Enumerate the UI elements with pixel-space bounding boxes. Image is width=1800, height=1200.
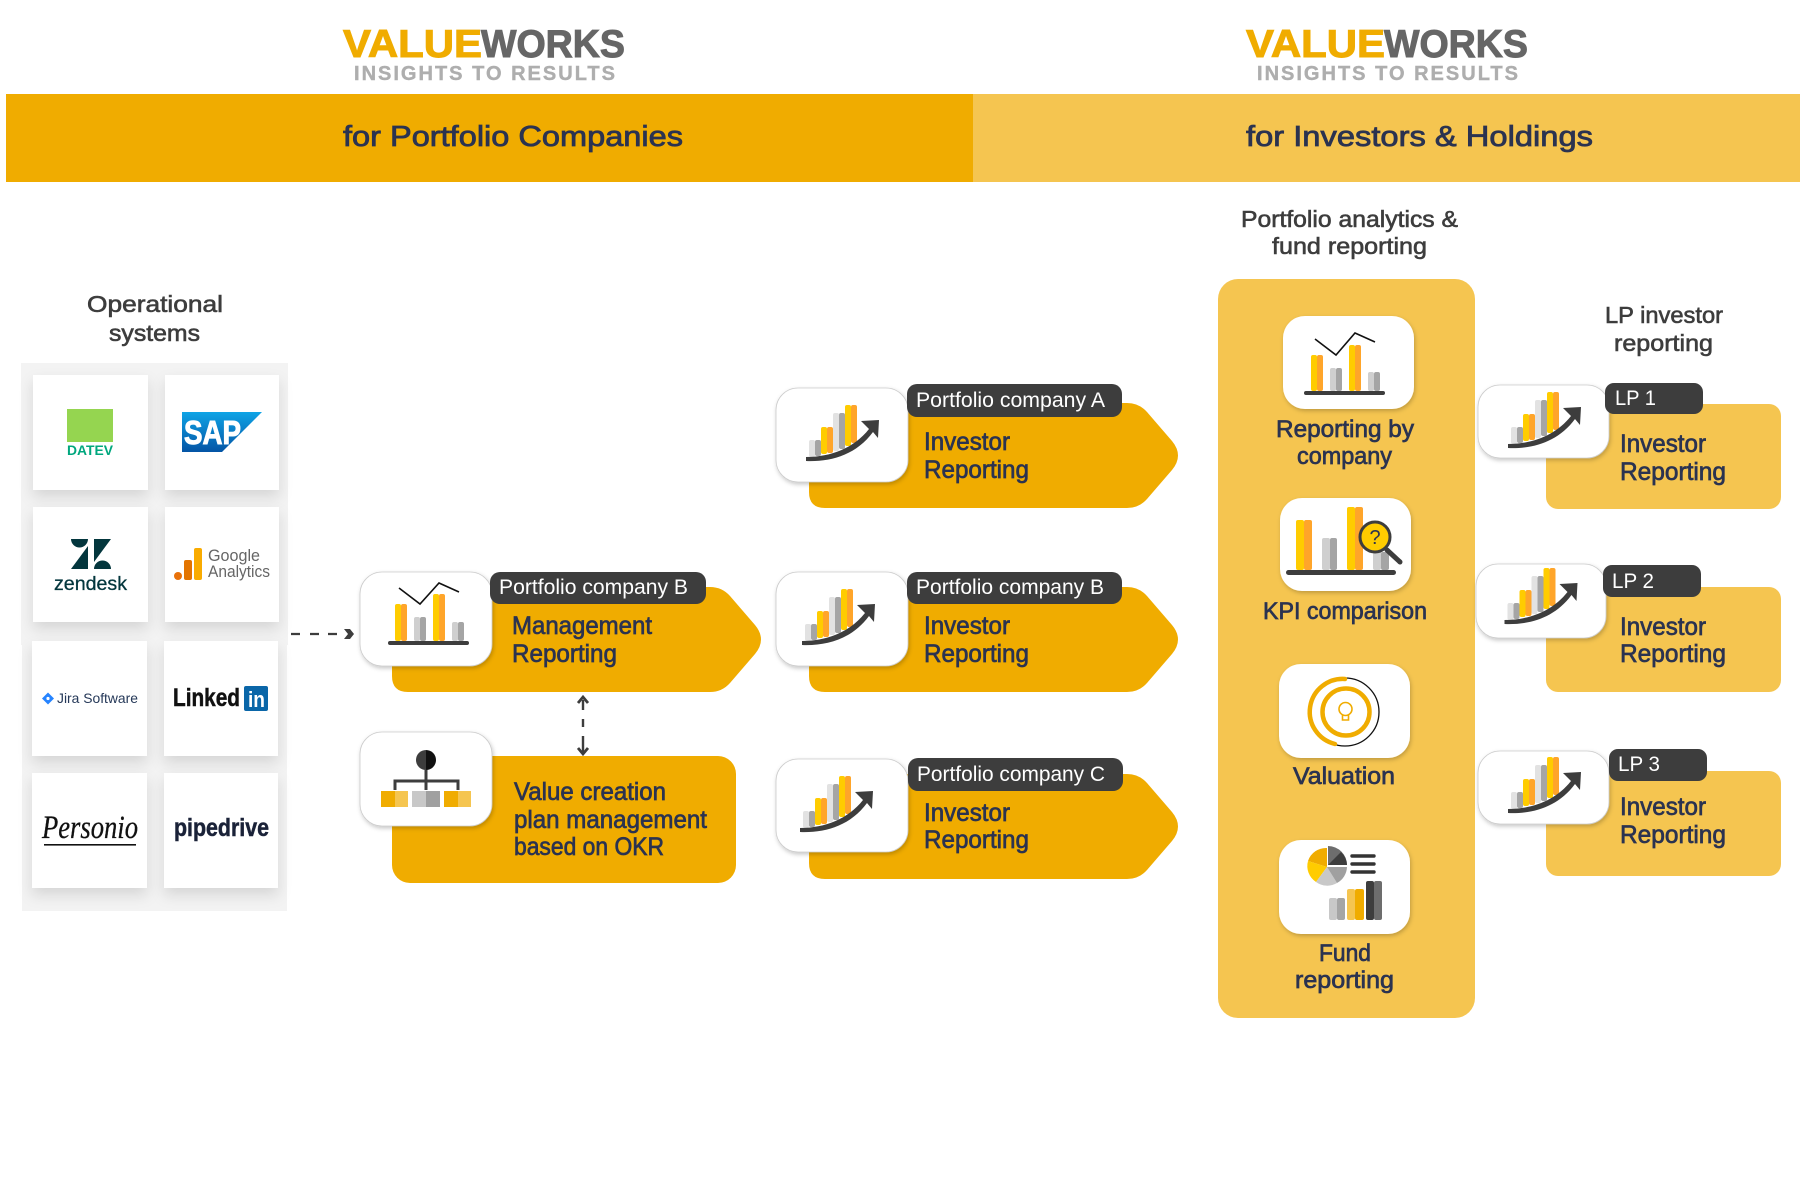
panel: Value creation plan: [360, 732, 736, 883]
heading: LP investor reporting: reporting: [1614, 330, 1713, 356]
heading: LP investor reporting: [1605, 302, 1723, 356]
label: Valuation: [1293, 763, 1395, 790]
text: Management Reporting: [512, 612, 652, 668]
logo tile: zendesk: zendesk: [54, 574, 128, 595]
logo tile: Google Analytics: [165, 507, 279, 622]
tag: Portfolio company A: Portfolio company A: [916, 389, 1105, 412]
tag: Portfolio company C: [908, 758, 1123, 791]
icon: bar and line chart: [1283, 316, 1414, 409]
logo: ValueWorks right: WORKS: [1384, 23, 1528, 66]
logo tile: zendesk: [33, 507, 148, 622]
tag: LP 3: [1609, 749, 1707, 781]
tag: LP 1: [1605, 383, 1703, 414]
text: Management Reporting: Management: [512, 612, 652, 640]
heading: Portfolio analytics & fund reporting: Portfolio analytics &: [1241, 206, 1458, 232]
text: Investor Reporting: [1620, 793, 1726, 849]
text: Investor Reporting: Investor: [924, 612, 1010, 640]
icon: growth chart: [1476, 564, 1606, 638]
logo tile: SAP: SAP: [184, 414, 241, 451]
item: Fund reporting: [1279, 840, 1410, 994]
panel: LP 1 Investor Reporting: [1478, 383, 1781, 509]
tag: LP 2: [1603, 565, 1701, 597]
tag: LP 2: LP 2: [1612, 570, 1654, 593]
icon: org hierarchy: [360, 732, 492, 826]
panel: LP 3 Investor Reporting: [1478, 749, 1781, 876]
heading: Operational systems: Operational: [87, 291, 223, 317]
arrow shape: [809, 403, 1178, 508]
logo tile: Jira Software: [32, 641, 147, 756]
text: Value creation plan management based on OKR: based on OKR: [514, 833, 664, 861]
header band: for Portfolio Companies: [6, 94, 974, 182]
logo tile: pipedrive: [164, 773, 278, 888]
text: Value creation plan management based on OKR: Value creation: [514, 778, 666, 806]
arrow shape: [809, 774, 1178, 879]
logo tile: Google Analytics: Analytics: [208, 562, 270, 581]
heading: Portfolio analytics & fund reporting: [1241, 206, 1458, 259]
heading: Operational systems: systems: [109, 320, 200, 346]
text: Value creation plan management based on OKR: plan management: [514, 806, 707, 834]
text: Investor Reporting: [1620, 430, 1726, 486]
logo tile: Jira Software: Jira Software: [57, 690, 138, 706]
tag: Portfolio company B: [907, 572, 1122, 604]
label: KPI comparison: [1263, 598, 1427, 625]
tag: Portfolio company B: Portfolio company B: [499, 576, 688, 599]
panel: LP 2 Investor Reporting: [1476, 564, 1781, 692]
tag: LP 1: LP 1: [1615, 387, 1656, 410]
item: Valuation: [1279, 664, 1410, 790]
label: Fund: [1319, 940, 1371, 967]
header band: for Investors & Holdings: [973, 94, 1800, 182]
text: Investor Reporting: Investor: [1620, 793, 1706, 821]
text: Investor Reporting: Investor: [1620, 430, 1706, 458]
arrow shape: [809, 587, 1178, 692]
text: Investor Reporting: Investor: [1620, 613, 1706, 641]
text: Investor Reporting: Reporting: [1620, 821, 1726, 849]
icon: growth chart: [776, 572, 908, 666]
text: Investor Reporting: Reporting: [924, 640, 1029, 668]
label: company: [1297, 443, 1392, 470]
logo tile: LinkedIn: Linked: [173, 684, 240, 712]
icon: bars with magnifier: ?: [1369, 527, 1381, 549]
icon: growth chart: [776, 759, 908, 852]
logo tile: Google Analytics: Google: [208, 546, 260, 565]
text: Investor Reporting: [924, 428, 1029, 484]
text: Value creation plan management based on OKR: [514, 778, 707, 861]
logo: ValueWorks right: VALUE: [1246, 23, 1385, 66]
logo tile: DATEV: [33, 375, 148, 490]
text: Investor Reporting: Reporting: [924, 826, 1029, 854]
logo tile: LinkedIn: in: [248, 687, 265, 712]
logo: ValueWorks right: INSIGHTS TO RESULTS: [1257, 63, 1518, 85]
header band: for Investors & Holdings: for Investors & Holdings: [1246, 121, 1593, 153]
label: Reporting by: [1276, 416, 1414, 443]
item: KPI comparison: [1263, 498, 1427, 625]
icon: target with light bulb: [1279, 664, 1410, 758]
logo: ValueWorks left: WORKS: [481, 23, 625, 66]
panel: Investor Reporting company A: [776, 384, 1178, 508]
label: reporting: [1295, 967, 1394, 994]
heading: LP investor reporting: LP investor: [1605, 302, 1723, 328]
arrow: systems to management reporting: [291, 629, 354, 639]
logo tile: SAP: [165, 375, 279, 490]
tag: Portfolio company B: [490, 572, 706, 604]
label: [1295, 940, 1394, 994]
tag: Portfolio company B: Portfolio company B: [916, 576, 1104, 599]
text: Investor Reporting: Investor: [924, 428, 1010, 456]
icon: bar and line chart: [360, 572, 492, 666]
tag: Portfolio company A: [907, 384, 1122, 417]
text: Investor Reporting: Reporting: [924, 456, 1029, 484]
arrow: two-way dashed: [578, 697, 588, 754]
text: Investor Reporting: [1620, 613, 1726, 668]
icon: pie and bars: [1279, 840, 1410, 934]
logo tile: DATEV: DATEV: [67, 442, 114, 458]
tag: Portfolio company C: Portfolio company C: [917, 763, 1105, 786]
heading: Portfolio analytics & fund reporting: fund reporting: [1272, 233, 1427, 259]
header band: for Portfolio Companies: for Portfolio Companies: [343, 121, 683, 153]
heading: Operational systems: [87, 291, 223, 346]
panel: Management Reporting: [360, 572, 761, 692]
logo: ValueWorks right: [1246, 23, 1528, 85]
icon: growth chart: [1478, 385, 1609, 458]
logo: ValueWorks left: VALUE: [343, 23, 482, 66]
logo tile: Personio: [32, 773, 147, 888]
arrow shape: [392, 587, 761, 692]
tag: LP 3: LP 3: [1618, 753, 1660, 776]
panel: Investor Reporting company C: [776, 758, 1178, 879]
logo: ValueWorks left: INSIGHTS TO RESULTS: [354, 63, 615, 85]
label: [1276, 416, 1414, 470]
item: Reporting by company: [1276, 316, 1414, 470]
text: Management Reporting: Reporting: [512, 640, 617, 668]
panel: operational systems logos: [21, 363, 288, 911]
icon: bars with magnifier: [1280, 498, 1411, 591]
text: Investor Reporting: Reporting: [1620, 458, 1726, 486]
icon: growth chart: [776, 388, 908, 482]
icon: growth chart: [1478, 751, 1609, 824]
logo tile: LinkedIn: [164, 641, 278, 756]
panel: Investor Reporting company B: [776, 572, 1178, 692]
text: Investor Reporting: Investor: [924, 799, 1010, 827]
text: Investor Reporting: Reporting: [1620, 640, 1726, 668]
text: Investor Reporting: [924, 799, 1029, 854]
logo tile: pipedrive: pipedrive: [174, 814, 269, 842]
panel: portfolio analytics: [1218, 279, 1475, 1018]
logo tile: Personio: Personio: [41, 810, 138, 846]
text: Investor Reporting: [924, 612, 1029, 668]
logo: ValueWorks left: [343, 23, 625, 85]
